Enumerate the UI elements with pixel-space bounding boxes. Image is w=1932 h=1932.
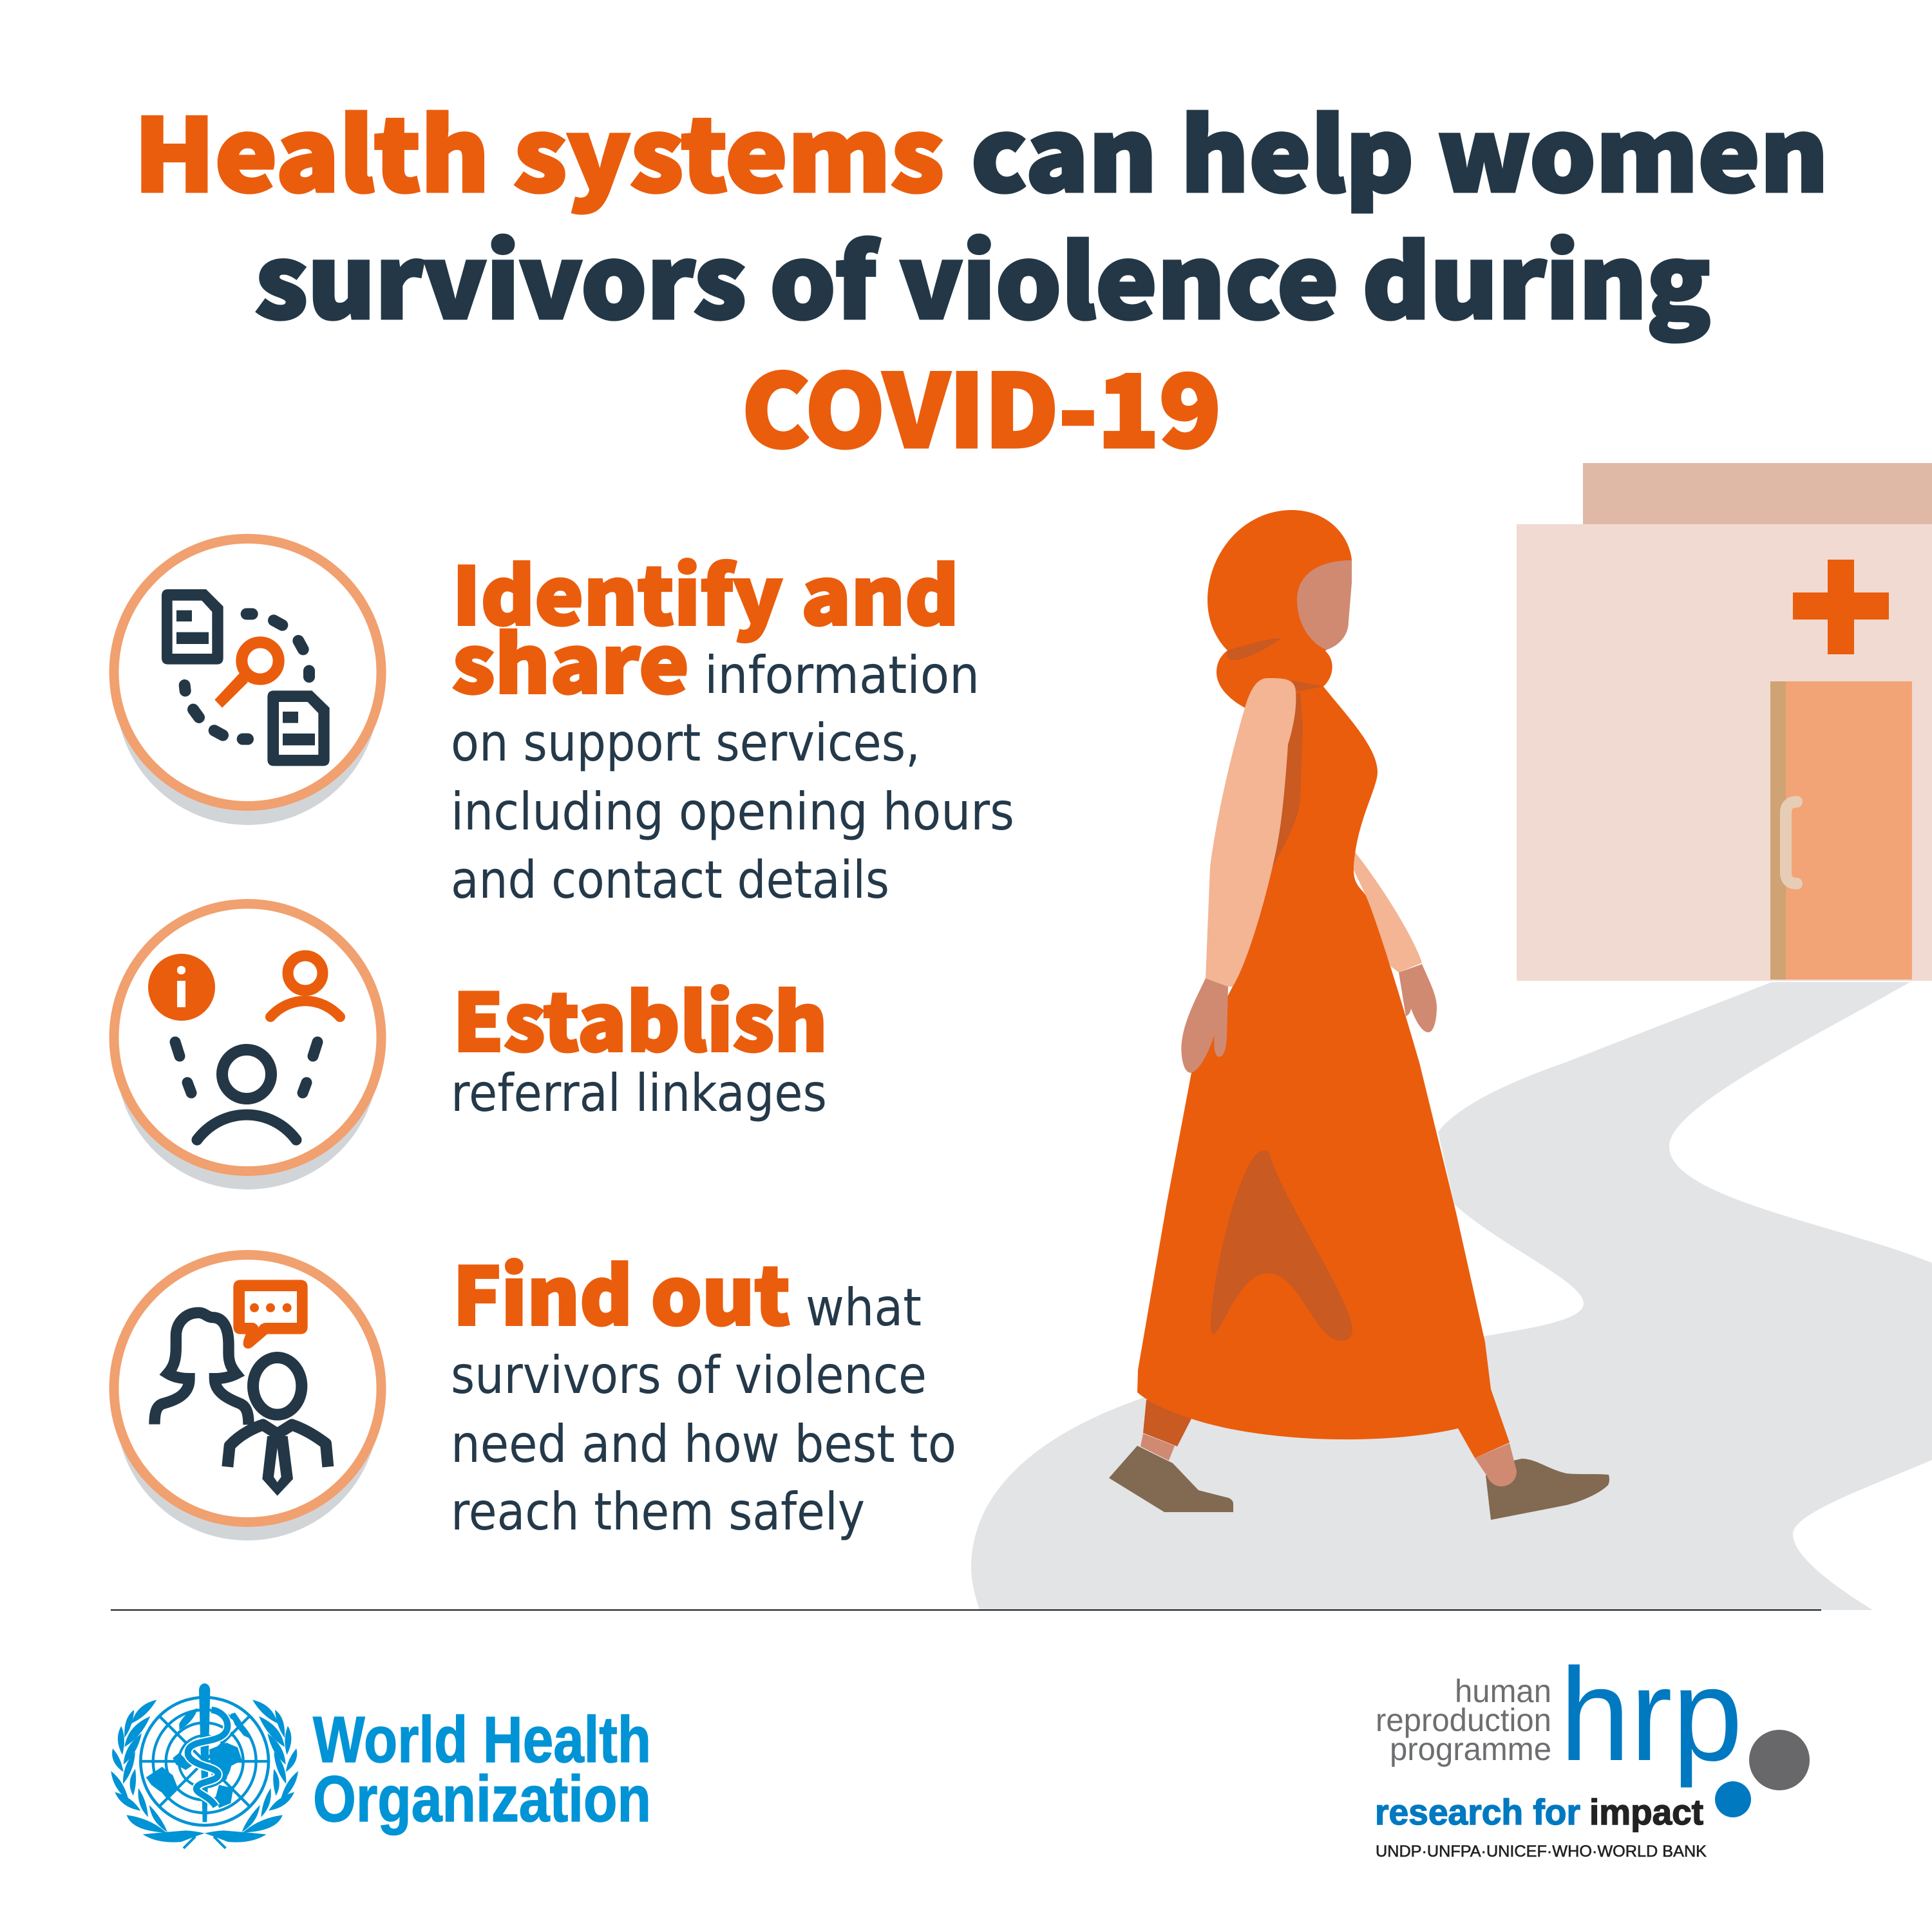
panel: find out	[114, 1233, 956, 1542]
hrp wordmark: hrp	[1560, 1641, 1743, 1788]
door	[1770, 681, 1912, 980]
programme name: human	[1455, 1673, 1551, 1709]
WHO emblem	[111, 1683, 298, 1848]
back arm and hand	[1354, 852, 1437, 1032]
front hand	[1181, 978, 1228, 1073]
neck shadow	[1291, 680, 1323, 692]
heading: identify and share: share	[452, 601, 689, 716]
face	[1297, 560, 1352, 650]
title: survivors of violence during	[255, 202, 1710, 347]
title	[134, 75, 1828, 476]
heading: identify and share: Identify and	[452, 533, 959, 648]
panel: establish referral linkages	[114, 904, 828, 1189]
heading: establish: Establish	[453, 960, 828, 1074]
body text: survivors' needs: what	[806, 1278, 922, 1338]
body text: referral linkages: referral linkages	[451, 1063, 827, 1123]
icon: documents and magnifier	[114, 538, 381, 825]
title: can help women	[971, 75, 1828, 220]
tagline: research for	[1375, 1792, 1580, 1832]
heading: identify and share	[452, 533, 959, 716]
WHO wordmark	[313, 1704, 651, 1835]
programme name	[1376, 1673, 1551, 1767]
dress fold shadow	[1211, 1150, 1352, 1341]
logo: human reproduction programme	[1375, 1641, 1810, 1861]
logo: World Health Organization	[111, 1683, 651, 1848]
body text: support services: and contact details	[451, 850, 889, 910]
tagline: impact	[1589, 1792, 1703, 1832]
programme name: programme	[1390, 1731, 1551, 1767]
dress	[1137, 680, 1510, 1458]
front foot and shoe	[1475, 1443, 1609, 1520]
WHO wordmark: Organization	[313, 1763, 651, 1835]
tagline	[1375, 1792, 1703, 1832]
heading: find out: Find out	[453, 1233, 790, 1348]
icon: two people talking	[114, 1255, 381, 1540]
body text: survivors' needs	[451, 1278, 956, 1542]
icon: referral people	[114, 904, 381, 1189]
body text: support services: including opening hours	[451, 782, 1014, 842]
red cross sign	[1793, 560, 1889, 654]
back leg and shoe	[1109, 1399, 1233, 1512]
body text: survivors' needs: survivors of violence	[451, 1345, 927, 1405]
torso shadow	[1271, 681, 1323, 870]
WHO wordmark: World Health	[313, 1704, 651, 1776]
panel: identify and share	[114, 533, 1014, 910]
sponsors: UNDP·UNFPA·UNICEF·WHO·WORLD BANK	[1376, 1842, 1707, 1861]
body text: support services	[451, 645, 1014, 910]
hospital building	[1517, 463, 1932, 981]
body text: survivors' needs: need and how best to	[451, 1414, 956, 1474]
title: COVID-19	[742, 331, 1221, 476]
body text: support services: on support services,	[451, 713, 920, 773]
front arm	[1206, 678, 1296, 987]
title: Health systems	[134, 75, 944, 220]
headscarf	[1208, 510, 1352, 708]
scarf shadow	[1227, 638, 1282, 660]
road	[971, 982, 1932, 1610]
woman walking	[1109, 510, 1609, 1520]
body text: support services: information	[705, 645, 980, 705]
programme name: reproduction	[1376, 1702, 1551, 1738]
logo dots	[1715, 1730, 1810, 1817]
body text: survivors' needs: reach them safely	[451, 1482, 865, 1542]
